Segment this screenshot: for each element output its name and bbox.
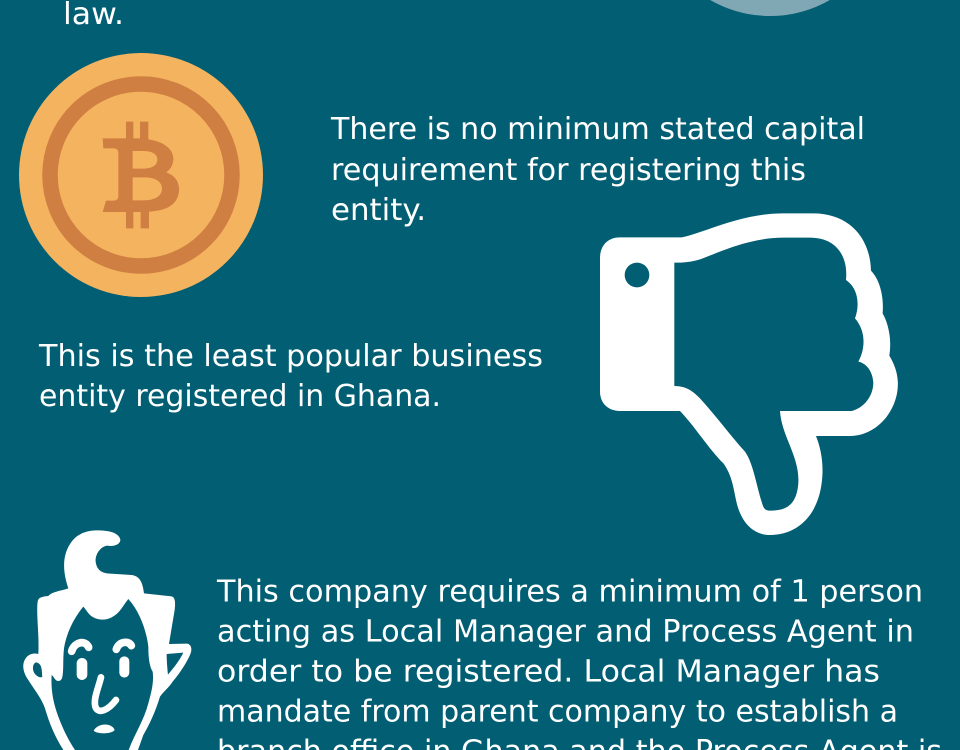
- icon: bitcoin coin: [19, 53, 263, 297]
- icon: pale circle cut off at top: [650, 0, 890, 16]
- text block: least popular entity: entity registered in Ghana.: [39, 379, 441, 414]
- text block: local manager and process agent: order to be registered. Local Manager has: [217, 654, 880, 690]
- icon: cartoon face: [23, 530, 191, 750]
- hair and face outline: [23, 530, 191, 750]
- text block: minimum stated capital: entity.: [331, 193, 426, 228]
- text block: local manager and process agent: This company requires a minimum of 1 person: [216, 574, 923, 610]
- eyebrows and eyes: [72, 643, 89, 651]
- text block: local manager and process agent: [216, 574, 942, 750]
- nose and mouth: [95, 677, 116, 711]
- text block: least popular entity: This is the least popular business: [38, 339, 543, 374]
- icon: thumbs down: [600, 213, 898, 535]
- text block: least popular entity: [38, 339, 543, 414]
- text block: minimum stated capital: requirement for registering this: [331, 153, 806, 188]
- text block: minimum stated capital: There is no minimum stated capital: [330, 112, 865, 147]
- text block: local manager and process agent: acting as Local Manager and Process Agent in: [217, 614, 914, 650]
- text block: local manager and process agent: mandate from parent company to establish a: [217, 694, 898, 730]
- text block: minimum stated capital: [330, 112, 865, 228]
